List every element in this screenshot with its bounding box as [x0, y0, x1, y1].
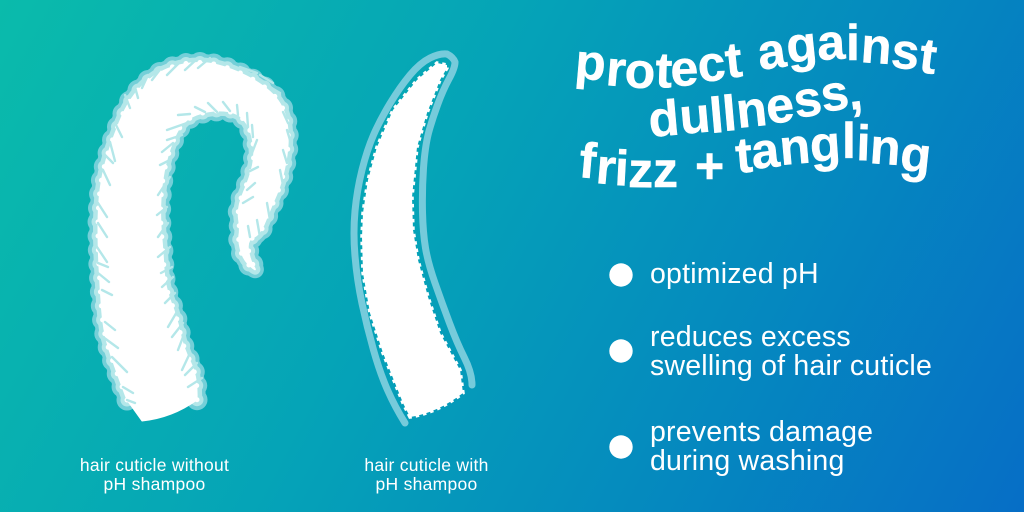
illustration: hair cuticle without pH shampoo — [97, 58, 290, 421]
benefit: prevents damage: during washing — [650, 445, 845, 477]
benefit: reduces swelling — [609, 321, 932, 382]
benefit: optimized pH: optimized pH — [650, 258, 819, 290]
benefit: reduces swelling: reduces excess — [650, 321, 851, 353]
white hair shaft — [98, 62, 288, 421]
illustration: hair cuticle with pH shampoo — [354, 54, 472, 423]
caption: with pH shampoo: hair cuticle with — [364, 455, 489, 475]
cuticle slits — [97, 58, 290, 403]
white serrated hair shaft — [362, 63, 463, 417]
smooth outer ring — [354, 54, 472, 423]
caption: without pH shampoo: pH shampoo — [104, 474, 205, 494]
title: wavy heading: protect against — [573, 14, 940, 100]
benefit: reduces swelling: swelling of hair cuticle — [650, 350, 932, 382]
title: wavy heading — [573, 14, 940, 198]
title: wavy heading: dullness, — [646, 64, 865, 148]
inner ring of raised cuticle — [98, 62, 288, 400]
benefit: prevents damage — [609, 416, 873, 477]
outer ring of raised cuticle — [98, 62, 288, 400]
title: wavy heading: frizz + tangling — [577, 113, 934, 198]
benefit: prevents damage: prevents damage — [650, 416, 873, 448]
caption: with pH shampoo: pH shampoo — [376, 474, 477, 494]
caption: without pH shampoo: hair cuticle without — [80, 455, 229, 475]
